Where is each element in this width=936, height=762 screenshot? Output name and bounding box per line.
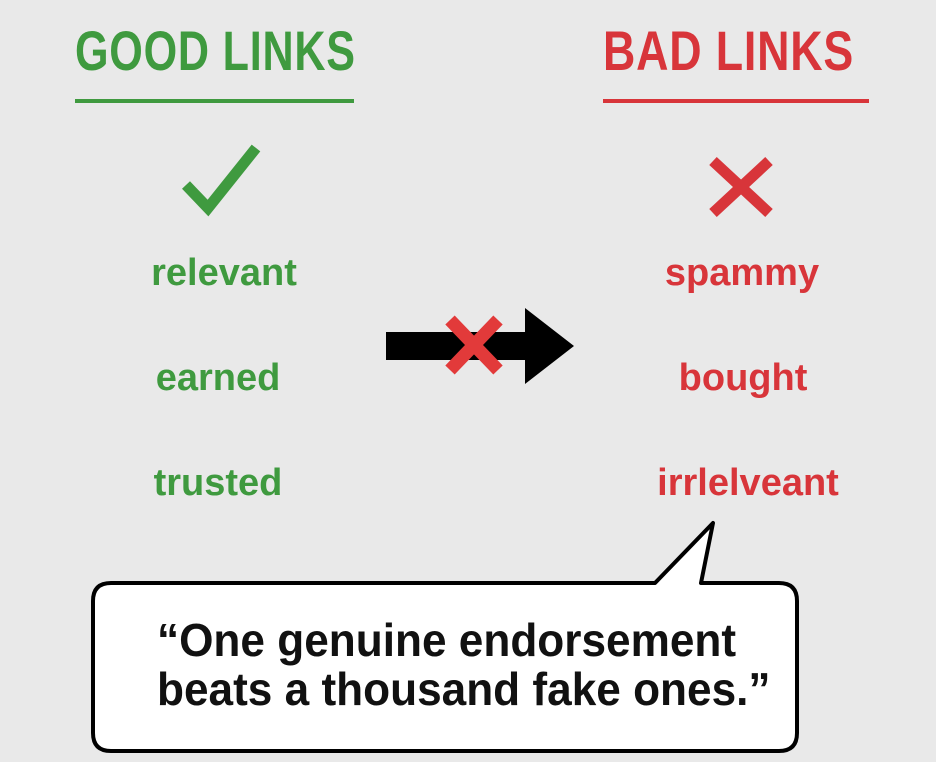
title: good links: GOOD LINKS bbox=[75, 19, 356, 82]
icon: check bbox=[182, 144, 260, 216]
word: relevant: relevant bbox=[151, 252, 297, 294]
quote text bbox=[157, 614, 770, 715]
word: earned: earned bbox=[156, 357, 280, 399]
good words bbox=[151, 252, 297, 504]
underline: good bbox=[75, 99, 354, 103]
bad words bbox=[657, 252, 839, 504]
arrow with cross bbox=[386, 308, 574, 384]
word: spammy: spammy bbox=[665, 252, 819, 294]
title: bad links: BAD LINKS bbox=[603, 19, 854, 82]
quote text: “One genuine endorsement bbox=[157, 614, 736, 666]
word: bought: bought bbox=[679, 357, 807, 399]
quote text: beats a thousand fake ones.” bbox=[157, 663, 770, 715]
icon: cross bbox=[709, 157, 773, 217]
word: irrlelveant: irrlelveant bbox=[657, 462, 839, 504]
underline: bad bbox=[603, 99, 869, 103]
word: trusted: trusted bbox=[154, 462, 282, 504]
